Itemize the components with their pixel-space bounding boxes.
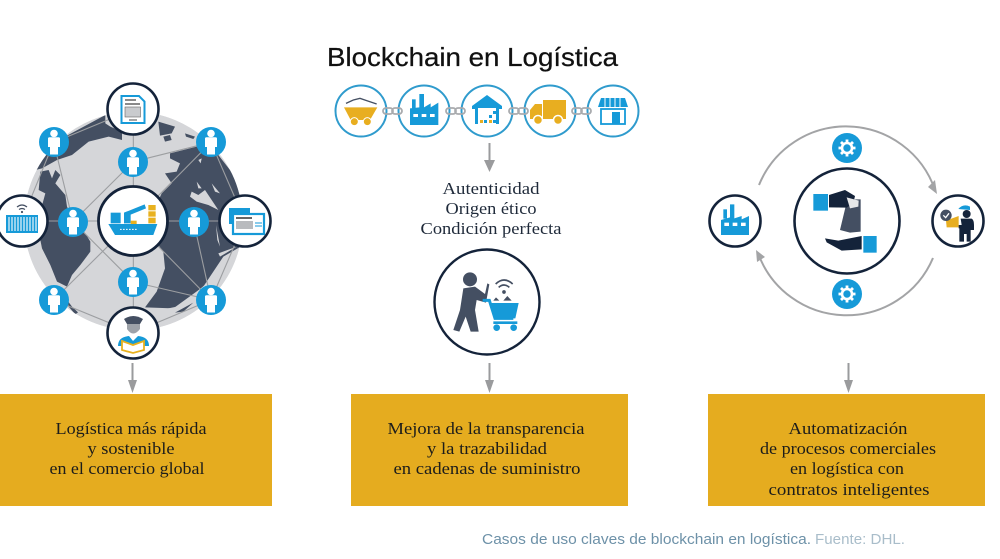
- arrow: chain to attributes: [484, 143, 495, 172]
- icon: delivery truck: [530, 100, 566, 124]
- text: attributes: [420, 179, 562, 238]
- arrowheads: [756, 180, 937, 262]
- caption: Fuente: DHL.: [815, 531, 905, 548]
- box: automation: de procesos comerciales: [760, 439, 936, 458]
- box: transparency: Mejora de la transparencia: [388, 419, 585, 438]
- box: automation: en logística con: [790, 459, 905, 478]
- box: faster logistics: y sostenible: [88, 439, 174, 458]
- box: faster logistics: en el comercio global: [50, 459, 205, 478]
- icon: smart container: [0, 196, 48, 246]
- icon: factory: [710, 196, 760, 246]
- icon: factory: [410, 94, 438, 125]
- icon: invoice document: [108, 84, 158, 134]
- text: attributes: Autenticidad: [442, 179, 540, 198]
- supply chain circles: [336, 86, 638, 136]
- icon: container ship hub: [98, 186, 168, 256]
- icon: bill of lading: [220, 196, 270, 246]
- icon: mine cart: [344, 98, 377, 126]
- chain links: [383, 108, 591, 114]
- icon: gear top: [832, 133, 862, 163]
- box: automation: [708, 394, 985, 506]
- icon: shop: [598, 98, 628, 124]
- box: automation: Automatización: [788, 419, 908, 438]
- panel: global trade network: [0, 84, 270, 358]
- icon: shopper with cart: [434, 250, 540, 354]
- network lines: [22, 109, 245, 333]
- box: transparency: y la trazabilidad: [427, 439, 548, 458]
- cycle arrows: [758, 126, 935, 315]
- box: transparency: [351, 394, 628, 506]
- arrow: shopper to box: [485, 363, 494, 393]
- caption: Casos de uso claves de blockchain en logística.: [482, 531, 811, 548]
- text: attributes: Origen ético: [446, 199, 536, 218]
- panel: smart contracts: [710, 126, 984, 393]
- arrow: contracts to box: [844, 363, 853, 393]
- panel: supply chain: [336, 86, 638, 393]
- box: faster logistics: Logística más rápida: [56, 419, 207, 438]
- icon: gear bottom: [832, 279, 862, 309]
- icon: customs officer: [108, 308, 158, 358]
- box: transparency: en cadenas de suministro: [394, 459, 580, 478]
- box: automation: contratos inteligentes: [768, 480, 930, 499]
- network participants: [39, 127, 226, 315]
- title: Blockchain en Logística: [327, 42, 619, 72]
- icon: delivery courier: [932, 196, 984, 246]
- arrow: globe to box: [128, 363, 137, 393]
- icon: warehouse: [472, 95, 502, 124]
- icon: handover of payment: [794, 168, 900, 274]
- box: faster logistics: [0, 394, 272, 506]
- text: attributes: Condición perfecta: [420, 219, 562, 238]
- globe: [28, 115, 240, 328]
